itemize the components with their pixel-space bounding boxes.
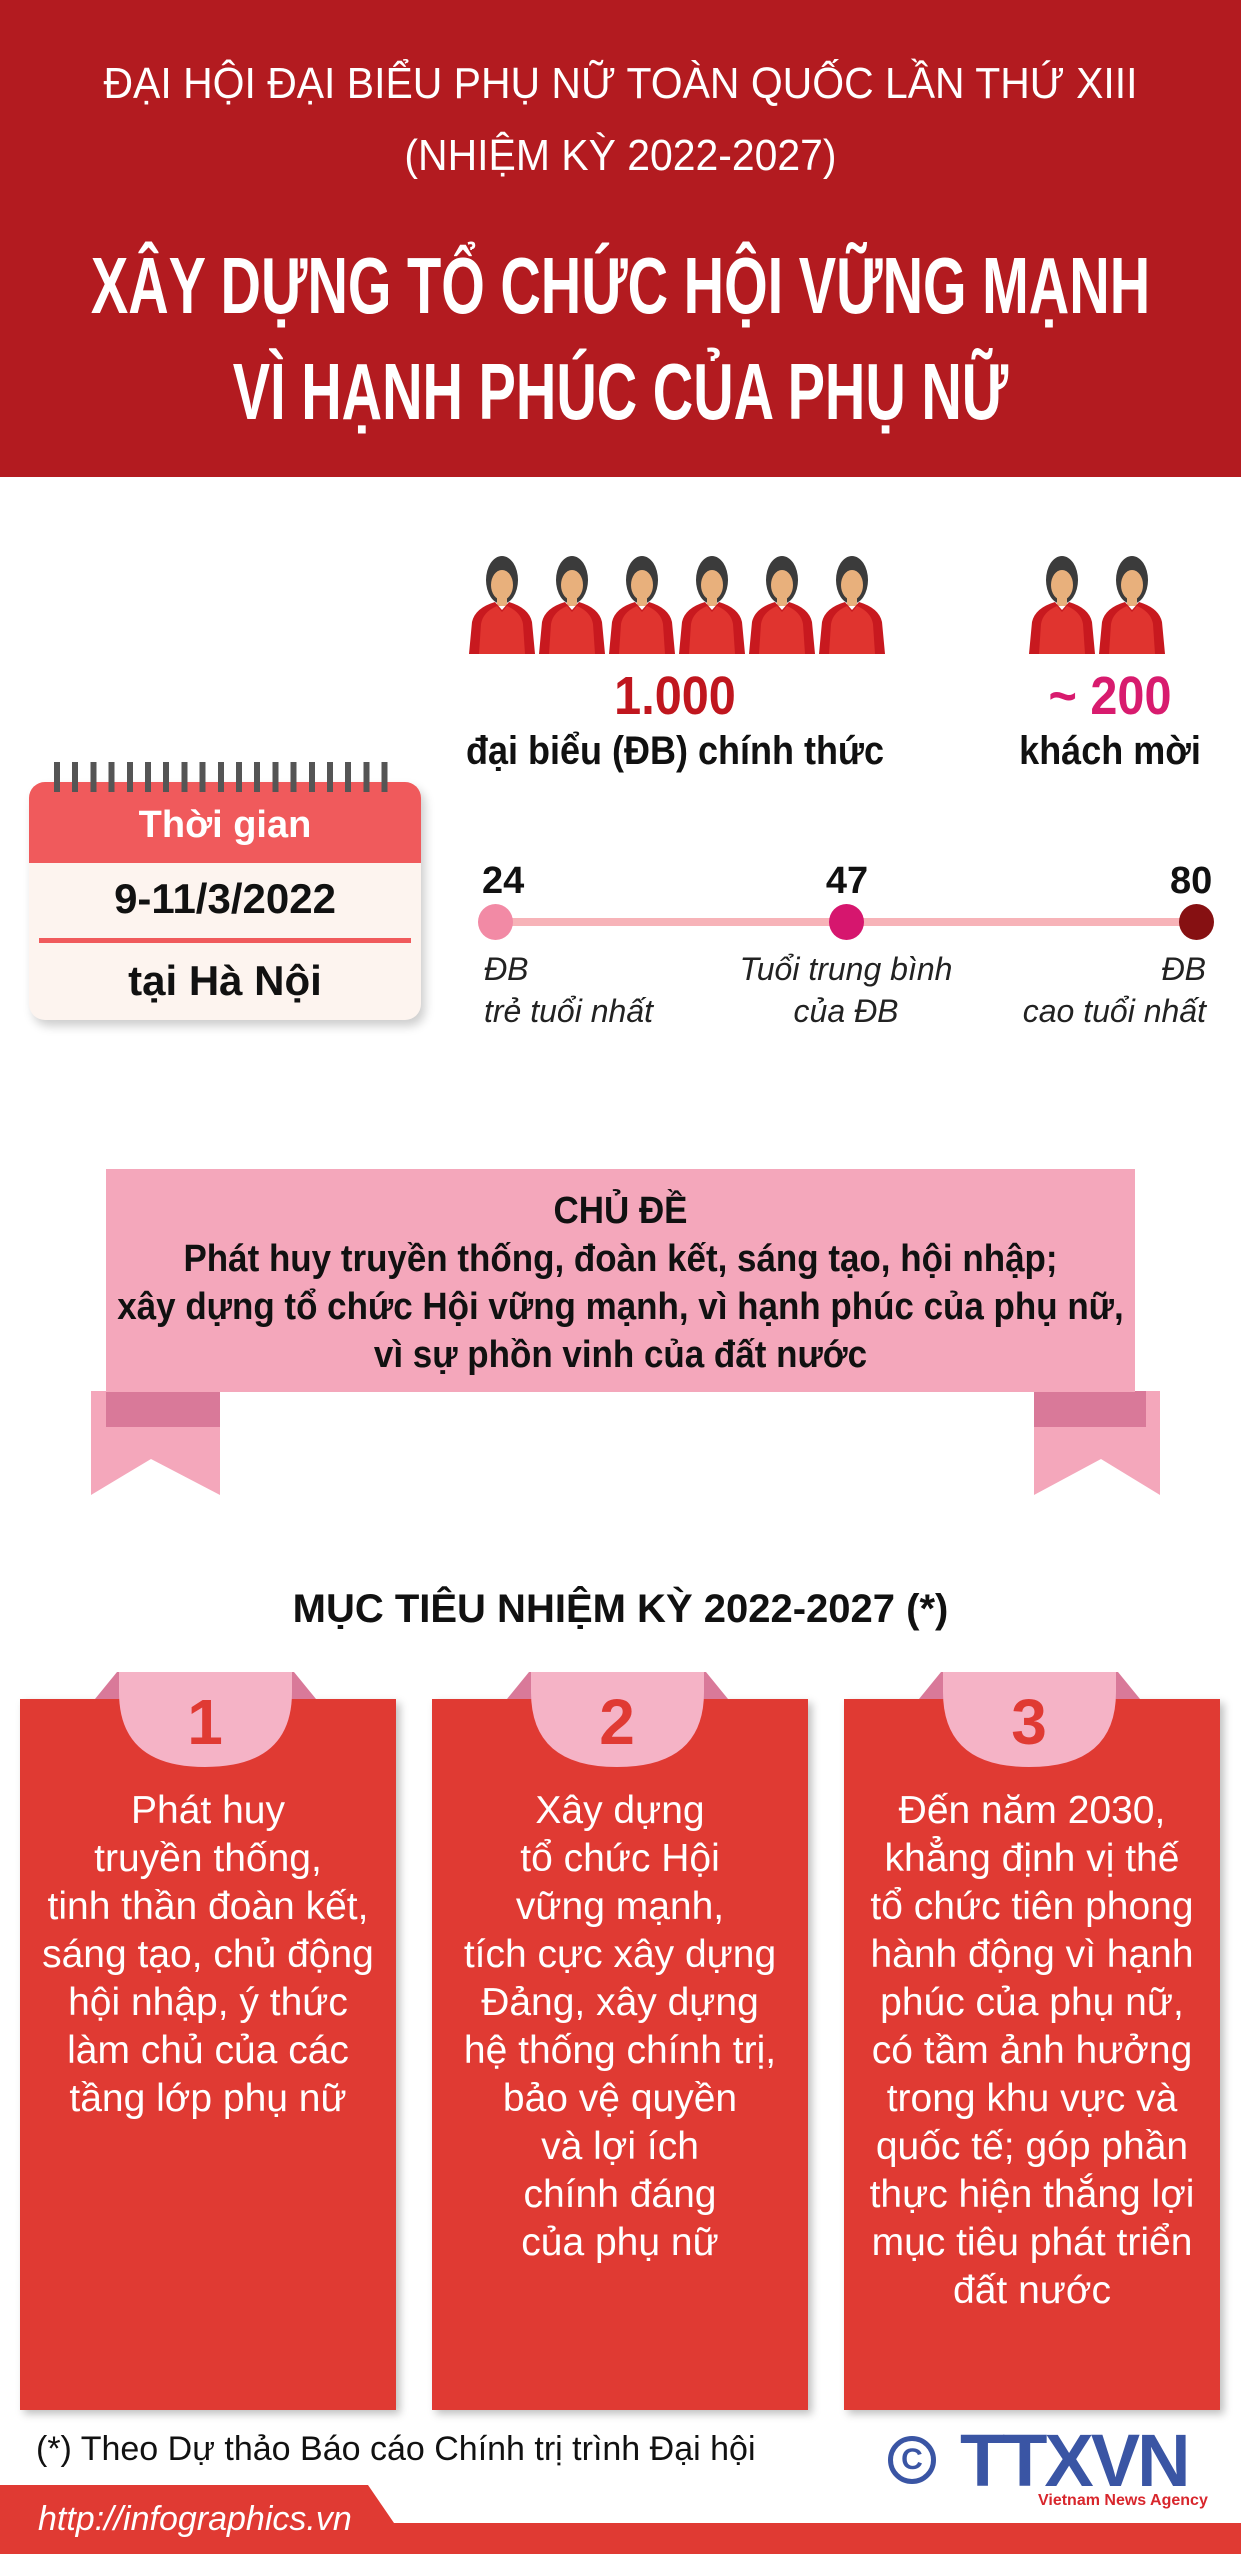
card 3: khẳng định vị thế bbox=[885, 1837, 1179, 1880]
average bbox=[829, 904, 864, 940]
logo: TTXVN bbox=[888, 2419, 1208, 2509]
calendar: time and place bbox=[28, 762, 430, 1030]
tab number 2 bbox=[507, 1672, 728, 1767]
title: VÌ HẠNH PHÚC CỦA PHỤ NỮ bbox=[233, 347, 1008, 436]
card 2 bbox=[432, 1699, 808, 2410]
footnote: (*) Theo Dự thảo Báo cáo Chính trị trình Đại hội bbox=[36, 2430, 756, 2468]
title: XÂY DỰNG TỔ CHỨC HỘI VỮNG MẠNH bbox=[91, 241, 1150, 330]
card 1: tinh thần đoàn kết, bbox=[48, 1885, 368, 1928]
card 3: đất nước bbox=[953, 2269, 1111, 2312]
title bbox=[91, 241, 1150, 436]
stat: 1000 delegates: 1.000 bbox=[614, 666, 736, 726]
url: http://infographics.vn bbox=[38, 2500, 352, 2538]
age timeline: ĐB bbox=[1162, 951, 1206, 987]
tab number 1 bbox=[95, 1672, 316, 1767]
card 2: tổ chức Hội bbox=[520, 1837, 720, 1880]
card 2: và lợi ích bbox=[541, 2125, 699, 2168]
banner: theme: vì sự phồn vinh của đất nước bbox=[374, 1334, 867, 1376]
card 3: trong khu vực và bbox=[887, 2077, 1177, 2120]
card 2: hệ thống chính trị, bbox=[464, 2029, 776, 2072]
subtitle bbox=[104, 58, 1137, 180]
card 3: thực hiện thắng lợi bbox=[870, 2173, 1194, 2216]
card 1: tầng lớp phụ nữ bbox=[69, 2077, 347, 2120]
card 3: tổ chức tiên phong bbox=[870, 1885, 1194, 1928]
stat: 200 guests: khách mời bbox=[1019, 729, 1201, 773]
age timeline: của ĐB bbox=[794, 993, 898, 1029]
card 1: truyền thống, bbox=[94, 1837, 322, 1880]
calendar: time and place: tại Hà Nội bbox=[128, 957, 322, 1004]
logo: TTXVN: Vietnam News Agency bbox=[1038, 2492, 1208, 2509]
calendar: time and place: Thời gian bbox=[139, 804, 311, 846]
card 3: hành động vì hạnh bbox=[870, 1933, 1194, 1976]
stat: 200 guests: ~ 200 bbox=[1049, 666, 1171, 726]
footer band bbox=[0, 2485, 1241, 2554]
heading: goals: MỤC TIÊU NHIỆM KỲ 2022-2027 (*) bbox=[293, 1587, 948, 1631]
logo: TTXVN: C bbox=[901, 2443, 923, 2476]
banner: theme: CHỦ ĐỀ bbox=[553, 1190, 688, 1232]
card 1: Phát huy bbox=[131, 1789, 285, 1832]
icon: 2 guests bbox=[1029, 556, 1165, 654]
card 2: vững mạnh, bbox=[516, 1885, 724, 1928]
card 3: mục tiêu phát triển bbox=[872, 2221, 1192, 2264]
header band bbox=[0, 0, 1241, 477]
age timeline: ĐB bbox=[484, 951, 528, 987]
icon: 6 delegates bbox=[469, 556, 885, 654]
age timeline bbox=[478, 860, 1214, 1029]
banner: theme: xây dựng tổ chức Hội vững mạnh, vì hạnh phúc của phụ nữ, bbox=[117, 1286, 1124, 1328]
card 3: Đến năm 2030, bbox=[899, 1789, 1165, 1832]
card 1 bbox=[20, 1699, 396, 2410]
banner: theme: Phát huy truyền thống, đoàn kết, sáng tạo, hội nhập; bbox=[183, 1238, 1058, 1280]
age timeline: cao tuổi nhất bbox=[1023, 993, 1206, 1029]
banner: theme bbox=[91, 1169, 1160, 1495]
age timeline: 80 bbox=[1170, 860, 1212, 902]
oldest bbox=[1179, 904, 1214, 940]
card 3: có tầm ảnh hưởng bbox=[872, 2029, 1192, 2072]
subtitle: (NHIỆM KỲ 2022-2027) bbox=[404, 131, 837, 180]
stat: 1000 delegates: đại biểu (ĐB) chính thức bbox=[466, 729, 884, 773]
card 2: bảo vệ quyền bbox=[503, 2077, 737, 2120]
card 2: chính đáng bbox=[523, 2173, 716, 2216]
youngest bbox=[478, 904, 513, 940]
card 3: quốc tế; góp phần bbox=[876, 2125, 1188, 2168]
card 2: tích cực xây dựng bbox=[464, 1933, 776, 1976]
card 1: hội nhập, ý thức bbox=[68, 1981, 348, 2024]
stat: 200 guests bbox=[1019, 666, 1201, 773]
age timeline: 24 bbox=[482, 860, 524, 902]
card 3: phúc của phụ nữ, bbox=[880, 1981, 1184, 2024]
card 1: sáng tạo, chủ động bbox=[42, 1933, 374, 1976]
age timeline: Tuổi trung bình bbox=[740, 951, 952, 987]
card 2: của phụ nữ bbox=[521, 2221, 719, 2264]
logo: TTXVN: TTXVN bbox=[960, 2419, 1188, 2502]
calendar: time and place: 9-11/3/2022 bbox=[114, 875, 336, 922]
subtitle: ĐẠI HỘI ĐẠI BIỂU PHỤ NỮ TOÀN QUỐC LẦN THỨ XIII bbox=[104, 59, 1137, 108]
age timeline: 47 bbox=[826, 860, 868, 902]
tab number 3 bbox=[919, 1672, 1140, 1767]
tab number 2: 2 bbox=[599, 1686, 635, 1758]
card 3 bbox=[844, 1699, 1220, 2410]
tab number 3: 3 bbox=[1011, 1686, 1047, 1758]
card 2: Đảng, xây dựng bbox=[481, 1981, 759, 2024]
age timeline: trẻ tuổi nhất bbox=[484, 993, 653, 1029]
stat: 1000 delegates bbox=[466, 666, 884, 773]
tab number 1: 1 bbox=[187, 1686, 223, 1758]
card 2: Xây dựng bbox=[535, 1789, 705, 1832]
card 1: làm chủ của các bbox=[67, 2029, 349, 2072]
